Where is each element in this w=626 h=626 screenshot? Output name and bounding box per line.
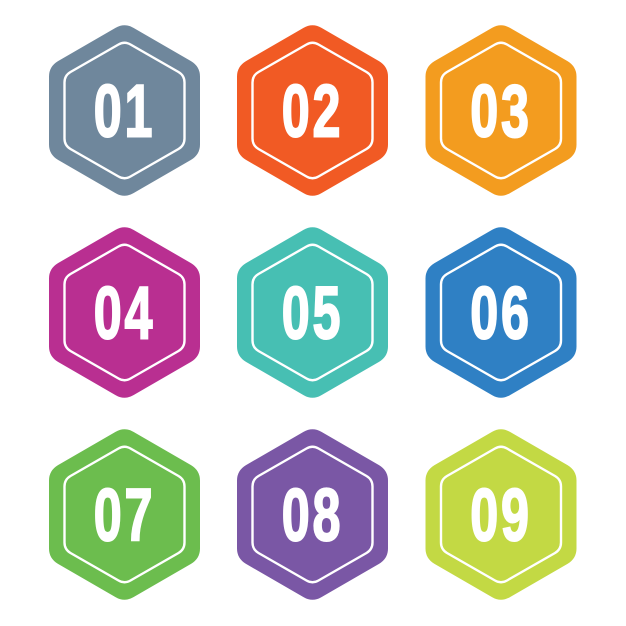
badge 04 magenta xyxy=(49,227,200,398)
badge 03 amber: 03 xyxy=(470,71,532,153)
badge 02 orange-red xyxy=(237,25,388,196)
badge 09 lime: 09 xyxy=(470,475,532,557)
badge 05 teal: 05 xyxy=(282,273,343,355)
badge 06 blue xyxy=(426,227,576,398)
badge 02 orange-red: 02 xyxy=(282,71,343,153)
badge 05 teal xyxy=(237,227,388,398)
badge 07 green: 07 xyxy=(94,475,155,557)
badge 08 purple: 08 xyxy=(282,475,343,557)
badge 04 magenta: 04 xyxy=(94,273,155,355)
badge 01 slate: 01 xyxy=(94,71,155,153)
badge 07 green xyxy=(49,429,200,600)
badge 03 amber xyxy=(426,25,576,196)
badge 08 purple xyxy=(237,429,388,600)
badge 01 slate xyxy=(49,25,200,196)
badge 06 blue: 06 xyxy=(470,273,532,355)
badge 09 lime xyxy=(426,429,576,600)
